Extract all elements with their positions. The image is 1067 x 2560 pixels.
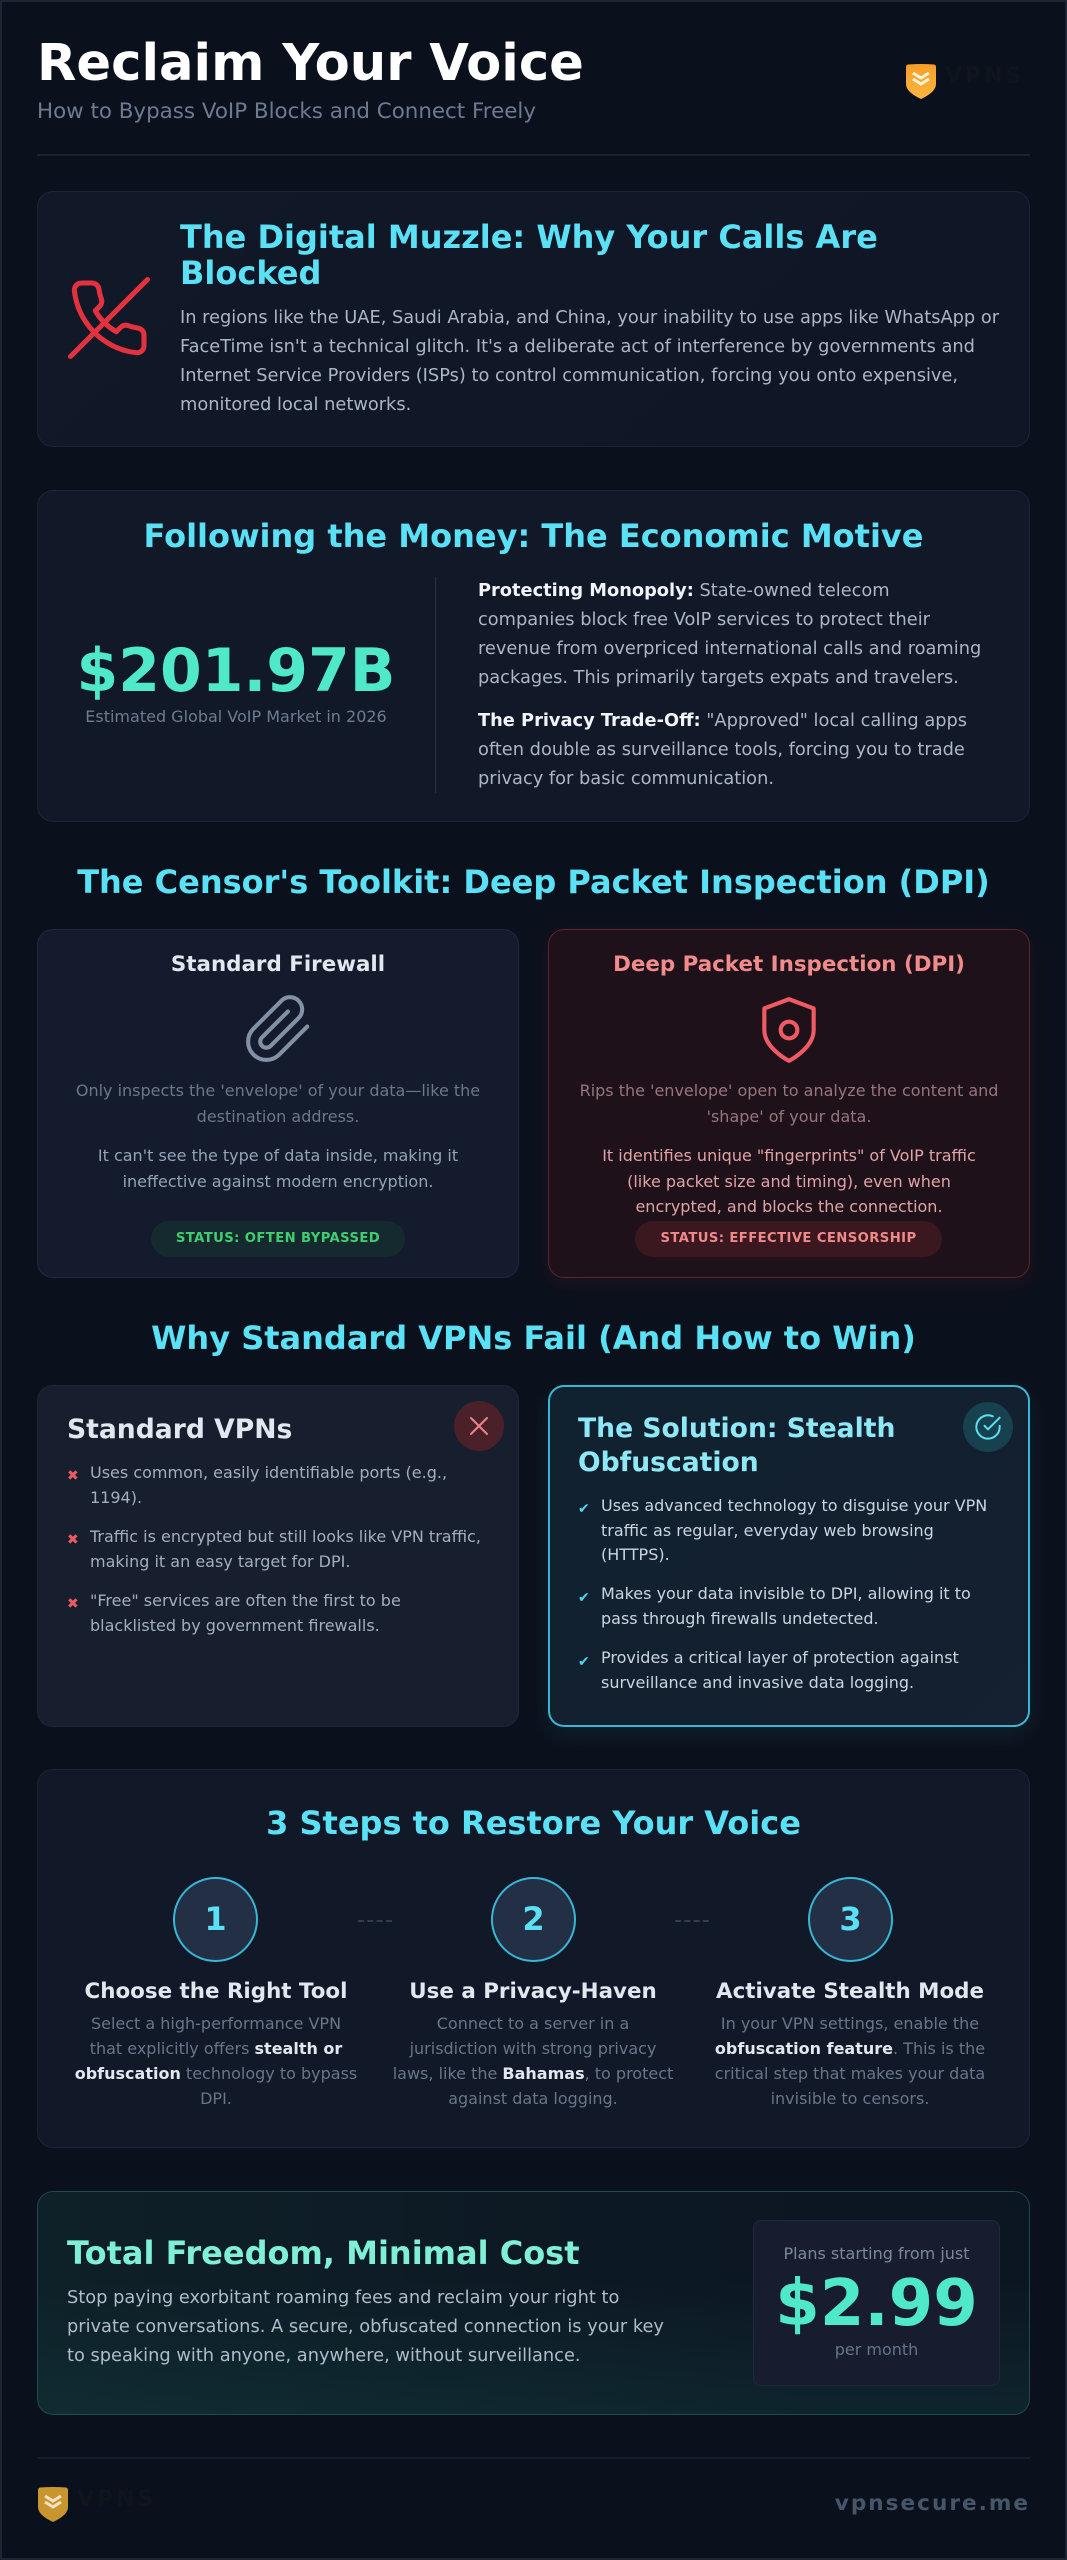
panel: call to action	[37, 2191, 1030, 2415]
logo: footer shield	[38, 2487, 156, 2522]
text block: 'shape' of your data.	[707, 1106, 871, 1126]
heading: The Digital Muzzle: Why Your Calls Are	[180, 218, 878, 256]
heading: Obfuscation	[578, 1447, 759, 1478]
heading: censor's toolkit: The Censor's Toolkit: Deep Packet Inspection (DPI)	[77, 863, 990, 901]
icon: paperclip	[246, 995, 310, 1062]
status badge: STATUS: EFFECTIVE CENSORSHIP	[660, 1231, 917, 1246]
title: Reclaim Your Voice	[37, 33, 584, 93]
list item: surveillance and invasive data logging.	[601, 1672, 914, 1692]
text block: privacy	[478, 710, 967, 789]
text block: privacy: often double as surveillance tools, forcing you to trade	[478, 739, 965, 760]
text block: monopoly: Protecting Monopoly: State-owned telecom	[478, 580, 890, 601]
list item: ✔	[578, 1590, 590, 1606]
arrow: connector	[358, 1920, 392, 1922]
text block: monopoly: companies block free VoIP services to protect their	[478, 609, 930, 630]
logo: header shield: VPNS	[945, 64, 1024, 89]
list item: ✖	[67, 1532, 79, 1548]
icon: check badge	[963, 1402, 1013, 1452]
text block: Stop paying exorbitant roaming fees and reclaim your right to	[67, 2287, 619, 2308]
stat: $201.97B	[76, 636, 396, 706]
text block: FaceTime isn't a technical glitch. It's a deliberate act of interference by governments and	[180, 336, 975, 357]
step number 3: 3	[839, 1900, 862, 1938]
stat: Estimated Global VoIP Market in 2026	[85, 707, 387, 726]
step 1 text: that explicitly offers stealth or	[90, 2039, 342, 2058]
list item: Provides a critical layer of protection against	[601, 1648, 959, 1667]
list item: 1194).	[90, 1488, 142, 1506]
text block: Only inspects the 'envelope' of your data—like the	[76, 1081, 480, 1100]
list item	[67, 1591, 401, 1634]
list item	[578, 1584, 971, 1628]
arrow: connector	[675, 1920, 709, 1922]
heading: The Solution: Stealth	[578, 1413, 895, 1444]
text block: encrypted, and blocks the connection.	[635, 1197, 943, 1216]
price box: Plans starting from just	[783, 2244, 970, 2263]
panel: economic motive	[37, 490, 1030, 822]
list item: making it an easy target for DPI.	[90, 1552, 350, 1570]
step 1 text: DPI.	[200, 2089, 232, 2108]
step 3 text: invisible to censors.	[771, 2089, 929, 2108]
text block: to speaking with anyone, anywhere, without surveillance.	[67, 2345, 581, 2366]
panel: standard firewall	[37, 929, 519, 1278]
text block	[580, 1081, 998, 1126]
step 1 text: Choose the Right Tool	[85, 1979, 347, 2004]
list item: ✖	[67, 1596, 79, 1612]
step number 3	[808, 1877, 893, 1962]
step 3 text: Activate Stealth Mode	[716, 1979, 984, 2004]
panel: three steps	[37, 1769, 1030, 2148]
logo: header shield	[906, 64, 1024, 99]
step number 1: 1	[204, 1900, 227, 1938]
list item: ✔	[578, 1654, 590, 1670]
list item	[67, 1527, 481, 1570]
text block: Internet Service Providers (ISPs) to control communication, forcing you onto expensive,	[180, 365, 958, 386]
subtitle: How to Bypass VoIP Blocks and Connect Freely	[37, 99, 536, 124]
text block	[180, 307, 1000, 415]
text block	[602, 1146, 976, 1216]
footer url: vpnsecure.me	[835, 2491, 1030, 2516]
panel: stealth obfuscation	[548, 1385, 1030, 1727]
status badge: STATUS: OFTEN BYPASSED	[176, 1231, 380, 1246]
step 3 text: In your VPN settings, enable the	[721, 2014, 979, 2033]
list item	[578, 1648, 959, 1692]
text block: private conversations. A secure, obfuscated connection is your key	[67, 2316, 664, 2337]
text block: monitored local networks.	[180, 394, 411, 415]
list item: ✔	[578, 1501, 590, 1517]
list item: traffic as regular, everyday web browsing	[601, 1520, 934, 1540]
list item: Uses common, easily identifiable ports (e.g.,	[90, 1463, 447, 1482]
text block: (like packet size and timing), even when	[627, 1172, 951, 1190]
text block: monopoly: revenue from overpriced international calls and roaming	[478, 638, 981, 659]
list item	[578, 1496, 987, 1564]
heading: Total Freedom, Minimal Cost	[67, 2234, 580, 2272]
heading: Deep Packet Inspection (DPI)	[613, 952, 965, 977]
text block: monopoly	[478, 580, 981, 688]
step 3 text: obfuscation feature. This is the	[715, 2039, 985, 2058]
heading: Following the Money: The Economic Motive	[144, 517, 923, 555]
status badge	[635, 1221, 942, 1257]
list item: Uses advanced technology to disguise your VPN	[601, 1496, 987, 1515]
step 1 text	[75, 1979, 357, 2108]
text block	[98, 1146, 458, 1190]
panel: deep packet inspection	[548, 929, 1030, 1278]
step number 1	[173, 1877, 258, 1962]
step 3 text	[715, 1979, 985, 2108]
text block: ineffective against modern encryption.	[123, 1172, 433, 1190]
text block	[76, 1081, 480, 1126]
price box: $2.99	[775, 2267, 978, 2341]
step 2 text: laws, like the Bahamas, to protect	[393, 2064, 673, 2083]
status badge	[151, 1221, 405, 1257]
heading: Blocked	[180, 254, 321, 292]
list item: blacklisted by government firewalls.	[90, 1616, 380, 1634]
panel: standard VPNs	[37, 1385, 519, 1727]
icon: shield	[762, 997, 816, 1063]
step 2 text: Use a Privacy-Haven	[409, 1979, 657, 2004]
heading: Standard Firewall	[171, 952, 385, 977]
text block: Rips the 'envelope' open to analyze the content and	[580, 1081, 998, 1100]
list item: Traffic is encrypted but still looks like VPN traffic,	[90, 1527, 481, 1546]
step 3 text: critical step that makes your data	[715, 2064, 985, 2083]
list item: "Free" services are often the first to be	[90, 1591, 401, 1610]
heading	[180, 218, 878, 292]
heading: 3 Steps to Restore Your Voice	[266, 1804, 801, 1842]
list item: ✖	[67, 1468, 79, 1484]
step number 2: 2	[522, 1900, 545, 1938]
list item: Makes your data invisible to DPI, allowing it to	[601, 1584, 971, 1603]
step 2 text: jurisdiction with strong privacy	[410, 2039, 656, 2058]
price box	[753, 2220, 1000, 2386]
step 2 text: against data logging.	[448, 2089, 618, 2108]
icon: x badge	[454, 1401, 504, 1451]
text block	[67, 2287, 664, 2366]
text block: privacy: The Privacy Trade-Off: "Approved" local calling apps	[478, 710, 967, 731]
step number 2	[491, 1877, 576, 1962]
text block: It can't see the type of data inside, making it	[98, 1146, 458, 1165]
price box: per month	[835, 2340, 918, 2359]
text block: In regions like the UAE, Saudi Arabia, and China, your inability to use apps like WhatsApp or	[180, 307, 999, 328]
heading	[578, 1413, 895, 1478]
list item	[67, 1463, 447, 1506]
panel: digital muzzle	[37, 191, 1030, 447]
list item: (HTTPS).	[601, 1545, 670, 1564]
heading: Standard VPNs	[67, 1414, 292, 1445]
text block: privacy: privacy for basic communication.	[478, 768, 774, 789]
text block: destination address.	[197, 1106, 359, 1126]
logo: footer shield: VPNS	[77, 2487, 156, 2512]
icon: blocked phone	[68, 277, 150, 359]
step 1 text: obfuscation technology to bypass	[75, 2064, 357, 2083]
heading: why VPNs fail: Why Standard VPNs Fail (And How to Win)	[151, 1319, 916, 1357]
step 2 text: Connect to a server in a	[437, 2014, 629, 2033]
text block: It identifies unique "fingerprints" of VoIP traffic	[602, 1146, 976, 1165]
text block: monopoly: packages. This primarily targets expats and travelers.	[478, 667, 959, 688]
step 1 text: Select a high-performance VPN	[91, 2014, 341, 2033]
list item: pass through firewalls undetected.	[601, 1608, 879, 1628]
step 2 text	[393, 1979, 673, 2108]
